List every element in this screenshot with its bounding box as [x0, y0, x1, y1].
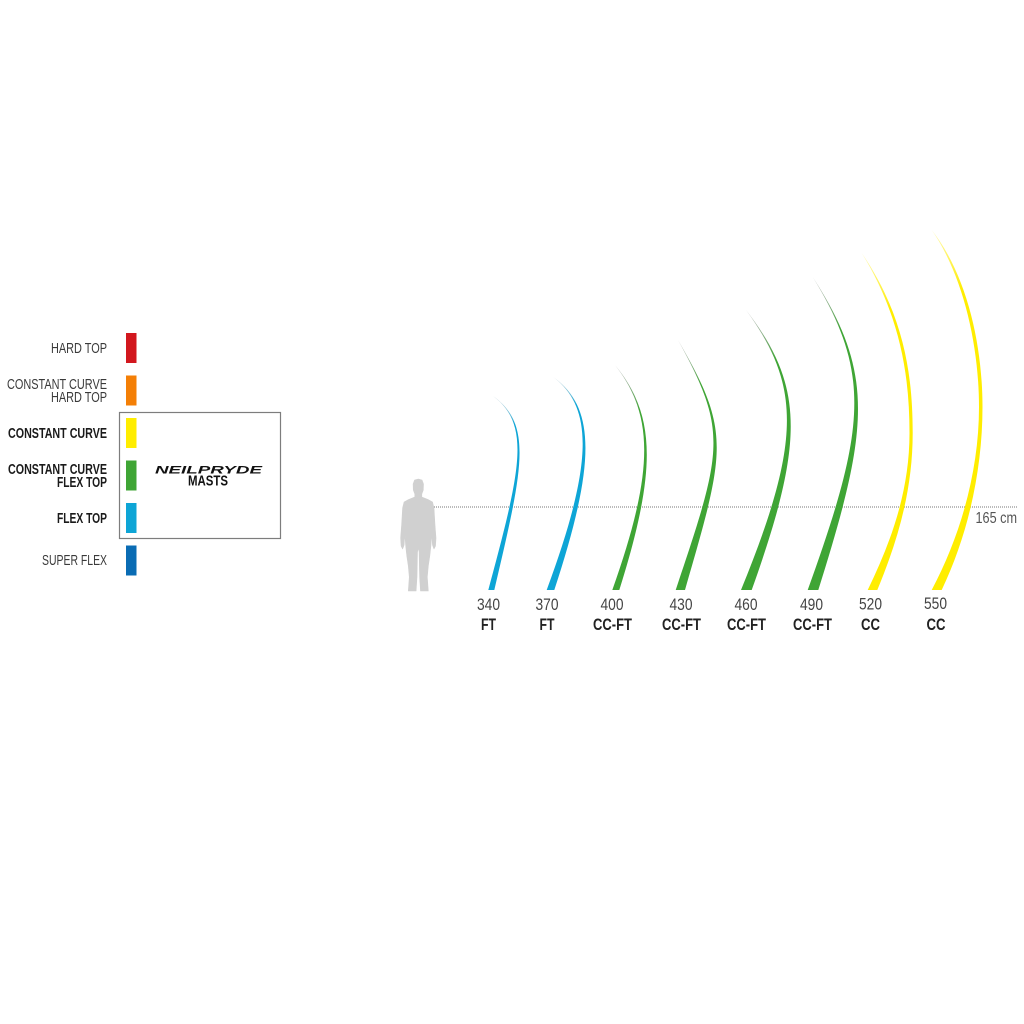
mast curve 490 CC-FT: [808, 277, 858, 590]
label 370 FT: FT: [540, 616, 554, 634]
mast curve 370 FT: [547, 377, 585, 590]
label 520 CC: [859, 596, 882, 634]
label 490 CC-FT: CC-FT: [793, 616, 832, 634]
label 520 CC: CC: [861, 616, 880, 634]
brand logo text: NEILPRYDE: [155, 464, 263, 476]
legend label: constant curve flex top: FLEX TOP: [57, 475, 107, 491]
label 550 CC: CC: [926, 616, 946, 634]
swatch: constant curve hard top: [126, 376, 136, 406]
mast curve 460 CC-FT: [741, 310, 791, 590]
label 400 CC-FT: [593, 596, 632, 634]
mast curve 520 CC: [862, 253, 913, 590]
label 340 FT: [477, 596, 500, 634]
label 370 FT: [536, 596, 558, 634]
brand logo text: MASTS: [188, 474, 228, 490]
legend: mast flex types: [7, 333, 280, 576]
swatch: constant curve: [126, 418, 136, 448]
swatch: super flex: [126, 546, 136, 576]
label 430 CC-FT: 430: [670, 596, 692, 614]
label 550 CC: [924, 595, 947, 634]
height reference dotted line: [434, 506, 1018, 508]
label 430 CC-FT: CC-FT: [662, 616, 701, 634]
swatch: hard top: [126, 333, 136, 363]
label 370 FT: 370: [536, 596, 558, 614]
label 340 FT: FT: [481, 616, 496, 634]
label 490 CC-FT: [793, 596, 832, 634]
label 520 CC: 520: [859, 596, 882, 614]
legend label: constant curve hard top: CONSTANT CURVE: [7, 377, 107, 393]
brand logo text: [155, 464, 263, 490]
legend label: constant curve: CONSTANT CURVE: [8, 426, 107, 442]
label 430 CC-FT: [662, 596, 701, 634]
neilpryde masts box: [120, 412, 280, 538]
mast curve 550 CC: [932, 230, 982, 590]
icon: human silhouette: [401, 479, 436, 591]
mast labels row: [477, 595, 947, 634]
swatch: flex top: [126, 503, 136, 533]
mast curve 340 FT: [488, 396, 520, 590]
swatch: constant curve flex top: [126, 460, 136, 490]
legend label: constant curve flex top: [8, 462, 107, 491]
label 460 CC-FT: [727, 596, 766, 634]
label 460 CC-FT: CC-FT: [727, 616, 766, 634]
label 400 CC-FT: CC-FT: [593, 616, 632, 634]
legend label: constant curve hard top: HARD TOP: [51, 390, 107, 406]
legend label: hard top: HARD TOP: [51, 341, 107, 357]
label 400 CC-FT: 400: [600, 596, 624, 614]
legend label: super flex: SUPER FLEX: [42, 553, 107, 569]
label 550 CC: 550: [924, 595, 947, 613]
label 460 CC-FT: 460: [734, 596, 758, 614]
legend label: constant curve flex top: CONSTANT CURVE: [8, 462, 107, 478]
mast curve 400 CC-FT: [612, 365, 647, 590]
legend label: flex top: FLEX TOP: [57, 511, 107, 527]
label 490 CC-FT: 490: [800, 596, 823, 614]
legend label: constant curve hard top: [7, 377, 107, 406]
label 340 FT: 340: [477, 596, 500, 614]
mast curve 430 CC-FT: [676, 340, 717, 590]
